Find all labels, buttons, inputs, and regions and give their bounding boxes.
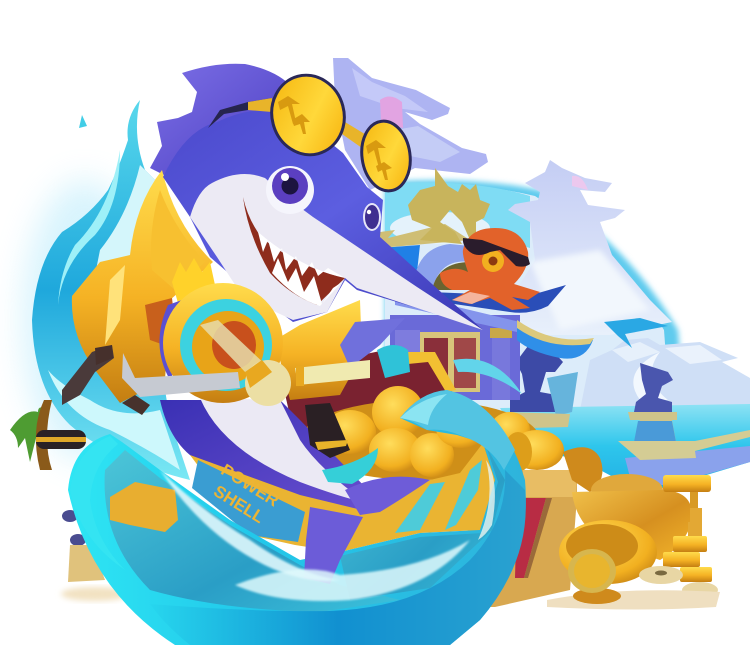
- white face: [190, 174, 483, 330]
- marlin: head: [163, 109, 483, 330]
- text: POWER: POWER: [218, 460, 282, 510]
- chest interior: [280, 350, 455, 460]
- glow around splash: [23, 180, 147, 460]
- old coins: [639, 566, 683, 584]
- hole: gold behind wave: [110, 482, 178, 532]
- crest: left wave top: [70, 436, 125, 570]
- water gun: [62, 283, 410, 458]
- chest: body: [440, 470, 577, 607]
- marlin: dorsal fin: [150, 64, 290, 178]
- ingot: big: [572, 490, 692, 560]
- coin: front: [573, 588, 621, 604]
- wave: inner left body: [105, 450, 400, 612]
- statue: left dragon: [510, 346, 563, 412]
- palm leaves: [10, 407, 48, 462]
- gun: inner: [192, 311, 264, 383]
- icon: octopus with sunglasses: [440, 228, 540, 310]
- icon: eye right: [363, 203, 381, 231]
- gun: rear cap: [145, 298, 178, 350]
- wave: inner right body: [340, 446, 505, 600]
- gun: sphere: [245, 360, 291, 406]
- gun: barrel: [295, 360, 370, 385]
- roof: upper tier: [430, 285, 566, 313]
- gun: glass tube: [200, 320, 284, 398]
- platform: walkway: [618, 430, 750, 460]
- gun: gold ring: [163, 283, 283, 403]
- lower strap: [305, 403, 350, 458]
- right fin: [345, 477, 430, 515]
- roof: dragon base: [380, 224, 470, 248]
- icon: gold dragon: [408, 168, 490, 244]
- distant temples and clouds: [580, 318, 750, 410]
- icon: eye left: [266, 166, 314, 214]
- wave and board: [68, 390, 526, 645]
- palace: large distant tower: [508, 160, 672, 335]
- whistle: [377, 345, 410, 378]
- roof: blue sky opening: [380, 245, 420, 290]
- water splash left: [32, 100, 190, 480]
- sand: [547, 590, 720, 610]
- stone statues: [503, 346, 750, 460]
- board: blue lettering panel: [192, 460, 305, 542]
- sea: [500, 404, 750, 488]
- buckle: [62, 345, 114, 405]
- icon: yellow sunglasses: [208, 67, 415, 194]
- cyan curl near chest: [453, 359, 522, 394]
- tail fin: [304, 507, 363, 584]
- wave: bottom band: [150, 470, 526, 645]
- mouth: [243, 197, 345, 305]
- text: SHELL: SHELL: [210, 482, 268, 527]
- arm and fin: [340, 318, 405, 368]
- temple: [380, 168, 594, 400]
- sky behind palace: [385, 180, 685, 412]
- gold strap ends: [122, 395, 150, 415]
- statue: right dragon: [634, 363, 673, 412]
- treasure chest and coins: [280, 350, 720, 610]
- coin: pile: [300, 400, 540, 480]
- roof: arch: [413, 244, 470, 290]
- wave: outer bowl: [68, 390, 526, 645]
- roof: right eave: [517, 322, 593, 359]
- ingot: dome: [591, 474, 663, 506]
- golden jacket: [72, 170, 362, 403]
- palace: upper left tower: [333, 58, 488, 190]
- teeth: [258, 232, 345, 278]
- left background pile: [36, 400, 129, 601]
- platform: left statue base: [503, 412, 570, 428]
- periwinkle water foreground: [625, 446, 750, 485]
- gun: silver handle: [122, 353, 240, 397]
- coin stack: [663, 475, 711, 492]
- gun: cyan ring: [180, 299, 272, 391]
- board: gold base: [190, 443, 495, 552]
- chest rim: [385, 352, 456, 392]
- ingot: back small: [563, 447, 602, 492]
- ingot: bowl: [559, 520, 657, 584]
- platform: right pedestal: [628, 412, 677, 442]
- board: teal inlays: [395, 482, 445, 533]
- foam: [160, 470, 340, 581]
- crest: right wave top: [400, 390, 515, 470]
- small teal splash over coins: [322, 448, 378, 484]
- marlin: lower body: [160, 398, 384, 512]
